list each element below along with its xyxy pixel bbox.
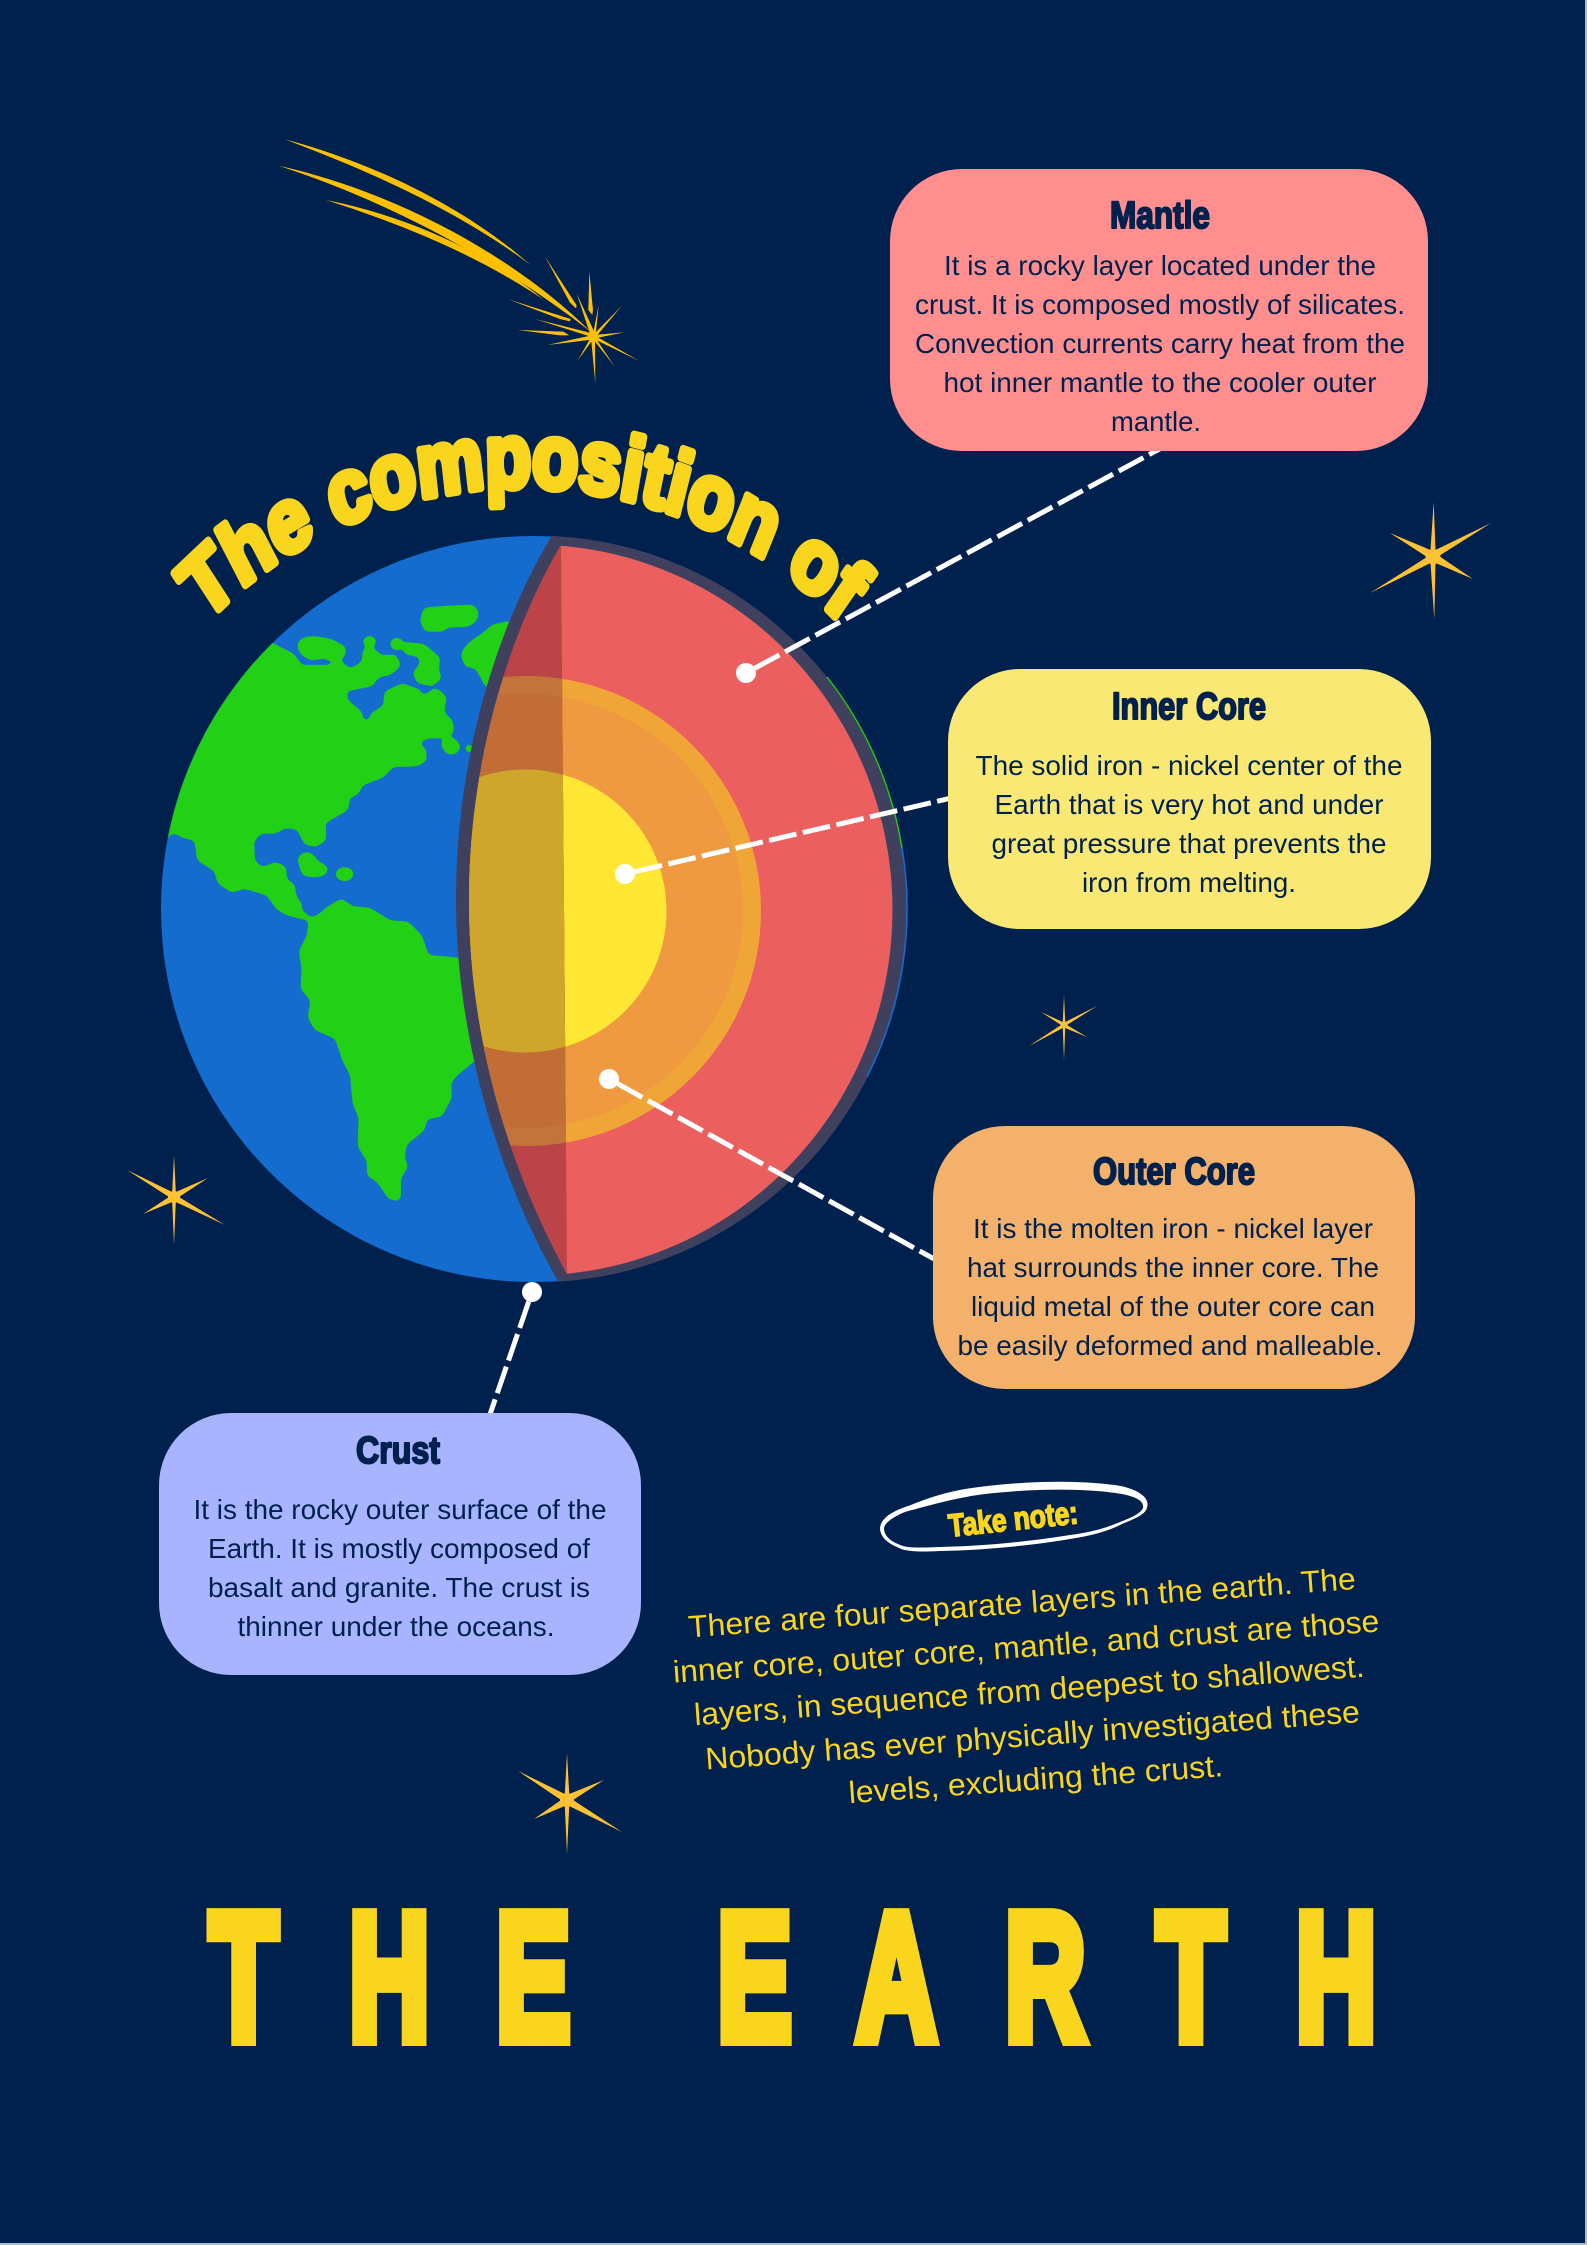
panel: outer core bbox=[933, 1126, 1415, 1389]
panel: inner core bbox=[948, 669, 1431, 929]
heading: inner core: Inner Core bbox=[1112, 686, 1266, 728]
green edge sliver bbox=[827, 677, 902, 848]
text: inner core description: The solid iron - nickel center of the bbox=[976, 750, 1402, 781]
text: mantle description: Convection currents carry heat from the bbox=[915, 328, 1405, 359]
cross-section layers bbox=[469, 546, 892, 1274]
text: crust description: Earth. It is mostly composed of bbox=[208, 1533, 590, 1564]
text: crust description bbox=[194, 1494, 606, 1642]
title: The composition of: The composition of bbox=[170, 430, 879, 622]
layer: outer core bbox=[469, 677, 761, 1146]
text: note paragraph bbox=[669, 1560, 1390, 1822]
pointer: crust bbox=[486, 1282, 542, 1426]
icon: earth globe with cross-section bbox=[140, 520, 920, 1300]
heading: crust: Crust bbox=[356, 1430, 440, 1472]
text: note paragraph: Nobody has ever physically investigated these bbox=[704, 1694, 1361, 1777]
text: mantle description: It is a rocky layer located under the bbox=[944, 250, 1376, 281]
text: inner core description: iron from melting. bbox=[1082, 867, 1296, 898]
text: inner core description: great pressure that prevents the bbox=[992, 828, 1386, 859]
text: note paragraph: levels, excluding the crust. bbox=[847, 1748, 1224, 1810]
text: crust description: thinner under the oceans. bbox=[238, 1611, 554, 1642]
heading: mantle: Mantle bbox=[1110, 195, 1210, 237]
continents bbox=[140, 607, 510, 1199]
text: crust description: It is the rocky outer surface of the bbox=[194, 1494, 606, 1525]
text: outer core description: hat surrounds the inner core. The bbox=[967, 1252, 1379, 1283]
pointer: inner core bbox=[615, 796, 960, 884]
text: mantle description: hot inner mantle to the cooler outer bbox=[944, 367, 1376, 398]
pointer: mantle bbox=[736, 446, 1165, 683]
brush ellipse bbox=[880, 1482, 1148, 1552]
text: outer core description: be easily deformed and malleable. bbox=[958, 1330, 1382, 1361]
panel: crust bbox=[159, 1413, 641, 1675]
take note label: Take note: bbox=[947, 1494, 1080, 1544]
text: mantle description: mantle. bbox=[1111, 406, 1201, 437]
icon: star bottom bbox=[518, 1753, 622, 1854]
icon: shooting star bbox=[278, 139, 639, 383]
globe ocean bbox=[161, 536, 907, 1282]
text: note paragraph: layers, in sequence from deepest to shallowest. bbox=[693, 1649, 1366, 1732]
cross-section rim bbox=[456, 536, 906, 1282]
icon: star left bbox=[127, 1155, 225, 1245]
text: inner core description: Earth that is very hot and under bbox=[994, 789, 1384, 820]
pointer: outer core bbox=[599, 1069, 945, 1265]
text: note paragraph: There are four separate layers in the earth. The bbox=[687, 1561, 1357, 1644]
shaded left side bbox=[469, 546, 567, 1274]
text: outer core description: It is the molten iron - nickel layer bbox=[973, 1213, 1373, 1244]
panel: mantle bbox=[890, 169, 1428, 451]
title: the earth: THE EARTH bbox=[210, 1876, 1376, 2077]
layer: mantle bbox=[469, 546, 892, 1274]
icon: star top right bbox=[1370, 502, 1491, 619]
layer: inner core bbox=[469, 774, 666, 1046]
text: mantle description: crust. It is composed mostly of silicates. bbox=[915, 289, 1405, 320]
text: crust description: basalt and granite. The crust is bbox=[208, 1572, 590, 1603]
callout: take note bbox=[880, 1482, 1148, 1552]
text: outer core description: liquid metal of the outer core can bbox=[971, 1291, 1375, 1322]
blue edge sliver bbox=[867, 848, 907, 1077]
text: outer core description bbox=[958, 1213, 1382, 1361]
icon: small star middle bbox=[1029, 995, 1097, 1060]
text: note paragraph: inner core, outer core, mantle, and crust are those bbox=[672, 1603, 1380, 1690]
heading: outer core: Outer Core bbox=[1093, 1151, 1255, 1193]
text: mantle description bbox=[915, 250, 1405, 437]
text: inner core description bbox=[976, 750, 1402, 898]
